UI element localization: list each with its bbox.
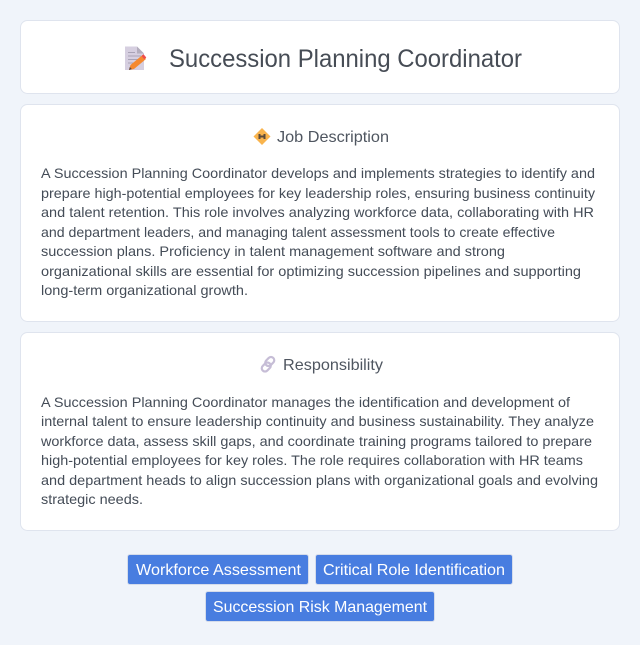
heading: responsibility: Responsibility (283, 357, 383, 374)
text block: job description: A Succession Planning Coordinator develops and implements strategies to identify and (41, 165, 595, 181)
text block: job description: prepare high-potential employees for key leadership roles, ensuring business continuity (41, 185, 595, 201)
text block: responsibility (40, 394, 598, 507)
tag: critical role identification: Critical Role Identification (323, 562, 505, 579)
text block: responsibility: internal talent to ensure leadership continuity and business sustainability. They analyze (41, 413, 594, 429)
text block: responsibility: and department heads to align succession plans with organizational goals and evolving (41, 472, 598, 488)
text block: responsibility: workforce data, assess skill gaps, and coordinate training programs tailored to prepare (40, 433, 592, 449)
tag: succession risk management (206, 592, 434, 622)
heading: job description: Job Description (277, 129, 389, 146)
panel: job description (20, 104, 620, 322)
text block: responsibility: high-potential employees for key roles. The role requires collaboration with HR teams (41, 452, 583, 468)
tag: workforce assessment (128, 554, 308, 584)
text block: job description: long-term organizational growth. (41, 282, 248, 298)
tag: succession risk management: Succession Risk Management (213, 599, 428, 616)
text block: job description: and department leaders, and managing talent assessment tools to create effective (41, 224, 555, 240)
text block: responsibility: strategic needs. (41, 491, 143, 507)
tag: critical role identification (316, 554, 512, 584)
text block: job description: organizational skills are essential for optimizing succession pipelines and supporting (41, 263, 581, 279)
text block: job description: succession plans. Proficiency in talent management software and strong (41, 243, 505, 259)
icon: document with pencil (125, 46, 146, 70)
text block: job description (41, 165, 595, 298)
text block: job description: and talent retention. This role involves analyzing workforce data, collaborating with HR (41, 204, 594, 220)
panel: title header (20, 20, 620, 94)
icon: orange diamond (254, 128, 270, 145)
title: Succession Planning Coordinator (169, 45, 522, 73)
icon: chain link (260, 356, 276, 373)
text block: responsibility: A Succession Planning Coordinator manages the identification and development of (41, 394, 570, 410)
panel: responsibility (20, 332, 620, 530)
tag: workforce assessment: Workforce Assessment (136, 562, 302, 579)
